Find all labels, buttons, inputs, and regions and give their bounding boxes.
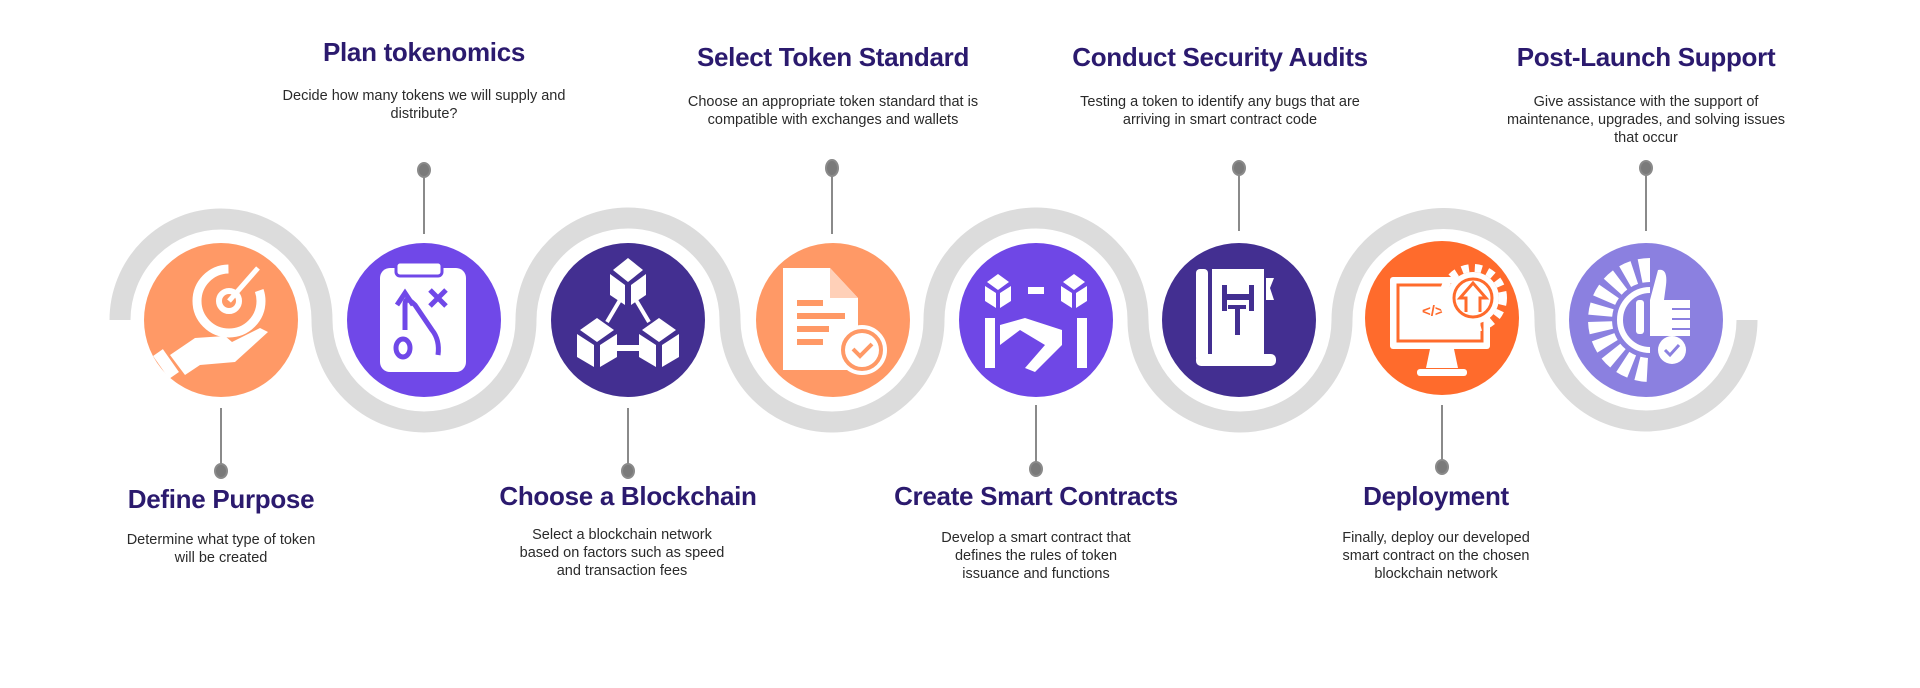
icon 2: clipboard strategy — [347, 243, 501, 397]
text: Plan tokenomics — [283, 88, 565, 122]
text: Deployment: blockchain network — [1374, 566, 1498, 582]
text: Create Smart Contracts: Develop a smart contract that — [941, 530, 1131, 546]
title: Create Smart Contracts: Create Smart Contracts — [894, 481, 1178, 511]
text: Conduct Security Audits: Testing a token to identify any bugs that are — [1080, 94, 1360, 110]
title: Conduct Security Audits: Conduct Security Audits — [1072, 42, 1368, 72]
text: Post-Launch Support — [1507, 94, 1785, 146]
text: Deployment: smart contract on the chosen — [1342, 548, 1529, 564]
text: Define Purpose: will be created — [175, 550, 267, 566]
wave track — [120, 218, 1747, 422]
text: Plan tokenomics: distribute? — [391, 106, 457, 122]
text: Deployment: Finally, deploy our developed — [1342, 530, 1530, 546]
icon 6: law book with gavel — [1162, 243, 1316, 397]
text: Deployment — [1342, 530, 1530, 582]
text: Conduct Security Audits — [1080, 94, 1360, 128]
text: Select Token Standard — [688, 94, 978, 128]
icon 7: monitor with gear — [1365, 241, 1519, 395]
title: Post-Launch Support: Post-Launch Support — [1517, 42, 1775, 72]
title: Define Purpose: Define Purpose — [128, 484, 314, 514]
icon 7: monitor with gear: </> — [1422, 303, 1444, 320]
icon 5: handshake contract — [959, 243, 1113, 397]
text: Select Token Standard: compatible with exchanges and wallets — [708, 112, 958, 128]
text: Define Purpose: Determine what type of token — [127, 532, 315, 548]
title: Plan tokenomics: Plan tokenomics — [323, 37, 525, 67]
text: Define Purpose — [127, 532, 315, 566]
text: Create Smart Contracts — [941, 530, 1131, 582]
icon 3: blockchain cubes — [551, 243, 705, 397]
text: Choose a Blockchain — [520, 527, 724, 579]
text: Conduct Security Audits: arriving in smart contract code — [1123, 112, 1317, 128]
icon 1: target in hand — [144, 243, 298, 397]
title: Choose a Blockchain: Choose a Blockchain — [499, 481, 757, 511]
text: Create Smart Contracts: issuance and functions — [962, 566, 1110, 582]
icon 4: document with check — [756, 243, 910, 397]
title: Select Token Standard: Select Token Standard — [697, 42, 969, 72]
title: Deployment: Deployment — [1363, 481, 1509, 511]
text: Choose a Blockchain: based on factors such as speed — [520, 545, 724, 561]
text: Post-Launch Support: Give assistance with the support of — [1534, 94, 1758, 110]
text: Plan tokenomics: Decide how many tokens we will supply and — [283, 88, 565, 104]
text: Choose a Blockchain: and transaction fees — [557, 563, 687, 579]
text: Create Smart Contracts: defines the rules of token — [955, 548, 1117, 564]
icon 8: gear with thumbs up — [1569, 243, 1723, 397]
connector lines — [215, 160, 1652, 478]
text: Post-Launch Support: that occur — [1614, 130, 1678, 146]
text: Choose a Blockchain: Select a blockchain network — [532, 527, 712, 543]
text: Post-Launch Support: maintenance, upgrades, and solving issues — [1507, 112, 1785, 128]
text: Select Token Standard: Choose an appropriate token standard that is — [688, 94, 978, 110]
